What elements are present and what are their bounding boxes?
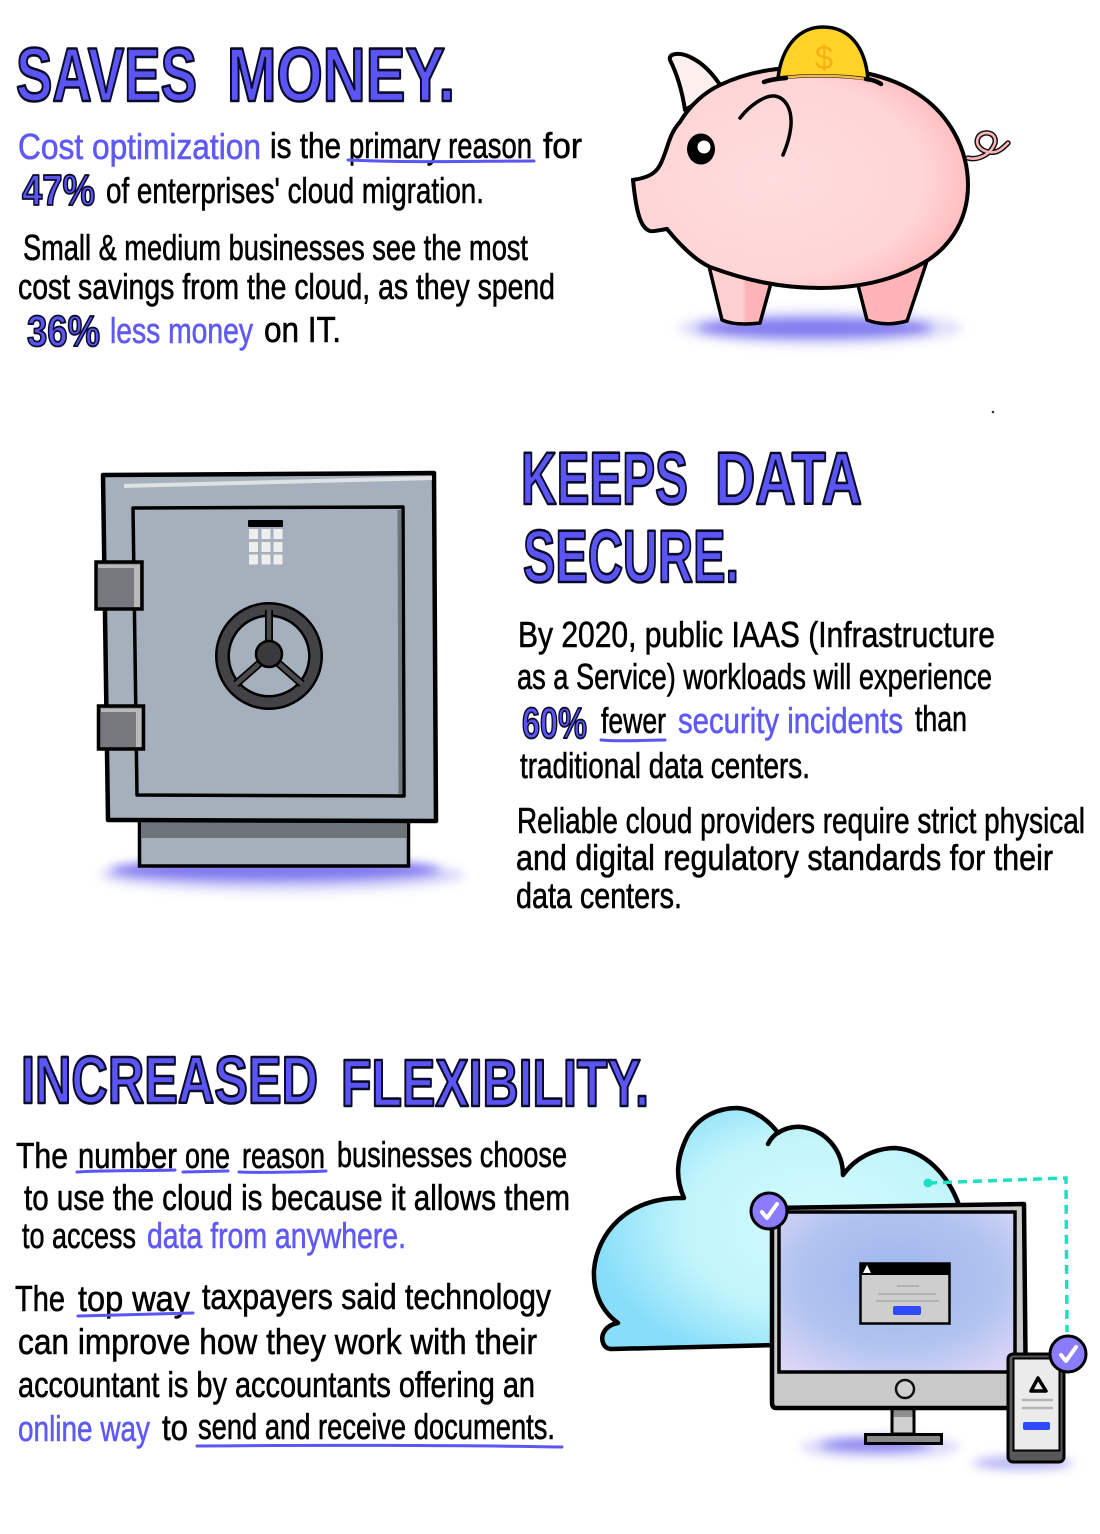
safe body	[103, 473, 436, 821]
text block: cost optimization: is the	[270, 125, 341, 166]
icon: coin	[778, 27, 868, 79]
text block: top way taxpayers: to	[162, 1407, 188, 1448]
heading: increased flexibility: INCREASED	[21, 1043, 318, 1118]
heading: increased flexibility: FLEXIBILITY.	[341, 1046, 649, 1121]
text block: cost optimization: of enterprises' cloud migration.	[106, 170, 484, 211]
heading: keeps data secure: KEEPS	[521, 437, 688, 520]
dialog window	[860, 1263, 950, 1324]
text block: number one reason: data from anywhere.	[147, 1215, 406, 1256]
text block: public IAAS: than	[915, 698, 967, 739]
heading: saves money	[16, 33, 455, 118]
heading: increased flexibility	[21, 1043, 649, 1121]
text block: number one reason: The	[16, 1135, 68, 1176]
text block: top way taxpayers: The	[15, 1278, 65, 1319]
panel: keeps data secure	[96, 437, 1085, 916]
text block: public IAAS: fewer	[601, 700, 666, 741]
dashed connector	[924, 1178, 1067, 1332]
icon: check badge	[1050, 1336, 1086, 1372]
text block: reliable cloud providers: data centers.	[516, 875, 682, 916]
text block: number one reason: to use the cloud is because it allows them	[24, 1177, 570, 1218]
text block: small and medium businesses	[18, 227, 555, 356]
text block: cost optimization: primary reason	[349, 125, 532, 166]
text block: cost optimization: for	[543, 125, 582, 166]
text block: number one reason	[16, 1134, 570, 1256]
icon: coin: $	[815, 39, 833, 76]
text block: public IAAS: traditional data centers.	[520, 745, 810, 786]
heading: keeps data secure: DATA	[715, 437, 862, 520]
heading: keeps data secure	[521, 437, 862, 598]
icon: check badge	[751, 1193, 787, 1229]
text block: number one reason: one	[185, 1135, 230, 1176]
bottom hinge	[98, 706, 144, 749]
text block: top way taxpayers: top way	[78, 1278, 190, 1319]
heading: keeps data secure: SECURE.	[523, 515, 739, 598]
heading: saves money: MONEY.	[227, 33, 455, 118]
icon: monitor	[772, 1204, 1026, 1444]
text block: top way taxpayers: online way	[18, 1408, 150, 1449]
text block: public IAAS: 60%	[522, 699, 587, 748]
panel: increased flexibility	[15, 1043, 1086, 1470]
text block: small and medium businesses: cost savings from the cloud, as they spend	[18, 266, 555, 307]
text block: cost optimization: 47%	[22, 166, 95, 215]
icon: phone	[1008, 1354, 1064, 1462]
text block: public IAAS: security incidents	[678, 700, 903, 741]
dial wheel	[222, 610, 316, 702]
heading: saves money: SAVES	[16, 33, 197, 118]
text block: number one reason: reason	[242, 1135, 325, 1176]
text block: top way taxpayers: send and receive documents.	[198, 1406, 555, 1447]
text block: small and medium businesses: 36%	[27, 307, 100, 356]
text block: reliable cloud providers	[516, 800, 1085, 916]
text block: cost optimization	[18, 125, 582, 215]
text block: public IAAS: By 2020, public IAAS (Infrastructure	[518, 614, 995, 655]
text block: number one reason: number	[78, 1135, 177, 1176]
text block: number one reason: businesses choose	[337, 1134, 567, 1175]
text block: small and medium businesses: less money	[110, 310, 253, 351]
keypad	[248, 520, 283, 564]
text block: top way taxpayers: can improve how they work with their	[18, 1321, 537, 1362]
illustration: safe	[96, 473, 464, 892]
illustration: cloud and devices	[594, 1108, 1086, 1470]
panel: saves money	[16, 27, 1008, 356]
text block: number one reason: to access	[22, 1215, 136, 1256]
text block: cost optimization: Cost optimization	[18, 126, 261, 167]
top hinge	[96, 562, 142, 609]
icon: cloud	[594, 1108, 959, 1349]
safe base	[140, 822, 408, 866]
text block: top way taxpayers: accountant is by accountants offering an	[18, 1364, 535, 1405]
text block: small and medium businesses: on IT.	[264, 309, 341, 350]
text block: top way taxpayers: taxpayers said technology	[202, 1276, 551, 1317]
text block: small and medium businesses: Small & medium businesses see the most	[23, 227, 528, 268]
text block: public IAAS	[517, 614, 995, 786]
text block: top way taxpayers	[15, 1276, 562, 1449]
illustration: piggy bank	[633, 27, 1008, 346]
